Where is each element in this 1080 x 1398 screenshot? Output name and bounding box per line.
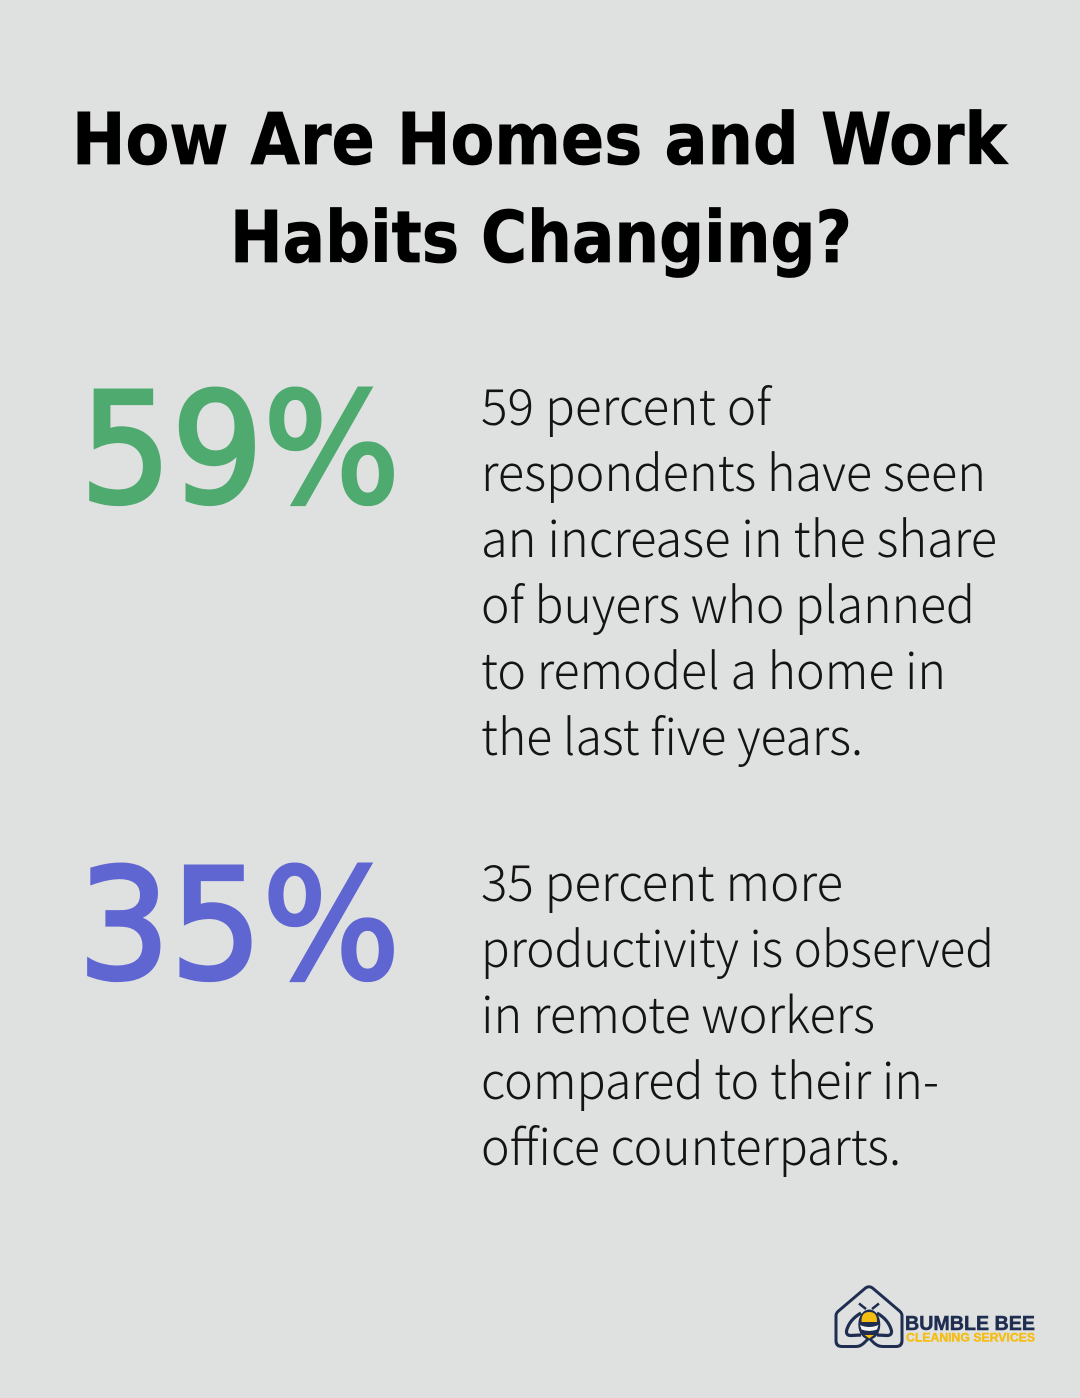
description: remote productivity: 35 percent more: [481, 844, 843, 916]
description: remodel buyers: [481, 368, 997, 770]
description: remodel buyers: to remodel a home in: [481, 632, 946, 704]
icon: house with bee: [836, 1287, 902, 1346]
logo: Bumble Bee Cleaning Services: [836, 1287, 1035, 1346]
description: remodel buyers: of buyers who planned: [481, 566, 975, 638]
panel: 59 percent statistic: [80, 361, 997, 770]
logo tagline: CLEANING SERVICES: [906, 1330, 1035, 1344]
description: remote productivity: productivity is observed: [481, 910, 994, 982]
description: remodel buyers: the last five years.: [481, 698, 863, 770]
big number: 59%: 59%: [80, 361, 400, 539]
description: remodel buyers: 59 percent of: [481, 368, 773, 440]
description: remote productivity: office counterparts.: [481, 1108, 901, 1180]
title: [72, 98, 1008, 279]
description: remote productivity: in remote workers: [481, 976, 875, 1048]
panel: 35 percent statistic: [78, 837, 994, 1180]
logo name: BUMBLE BEE: [905, 1312, 1035, 1335]
description: remote productivity: [481, 844, 994, 1180]
title: Habits Changing?: [230, 196, 852, 279]
description: remodel buyers: an increase in the share: [481, 500, 997, 572]
description: remote productivity: compared to their in-: [481, 1042, 939, 1114]
big number: 35%: 35%: [78, 837, 400, 1015]
description: remodel buyers: respondents have seen: [481, 434, 986, 506]
